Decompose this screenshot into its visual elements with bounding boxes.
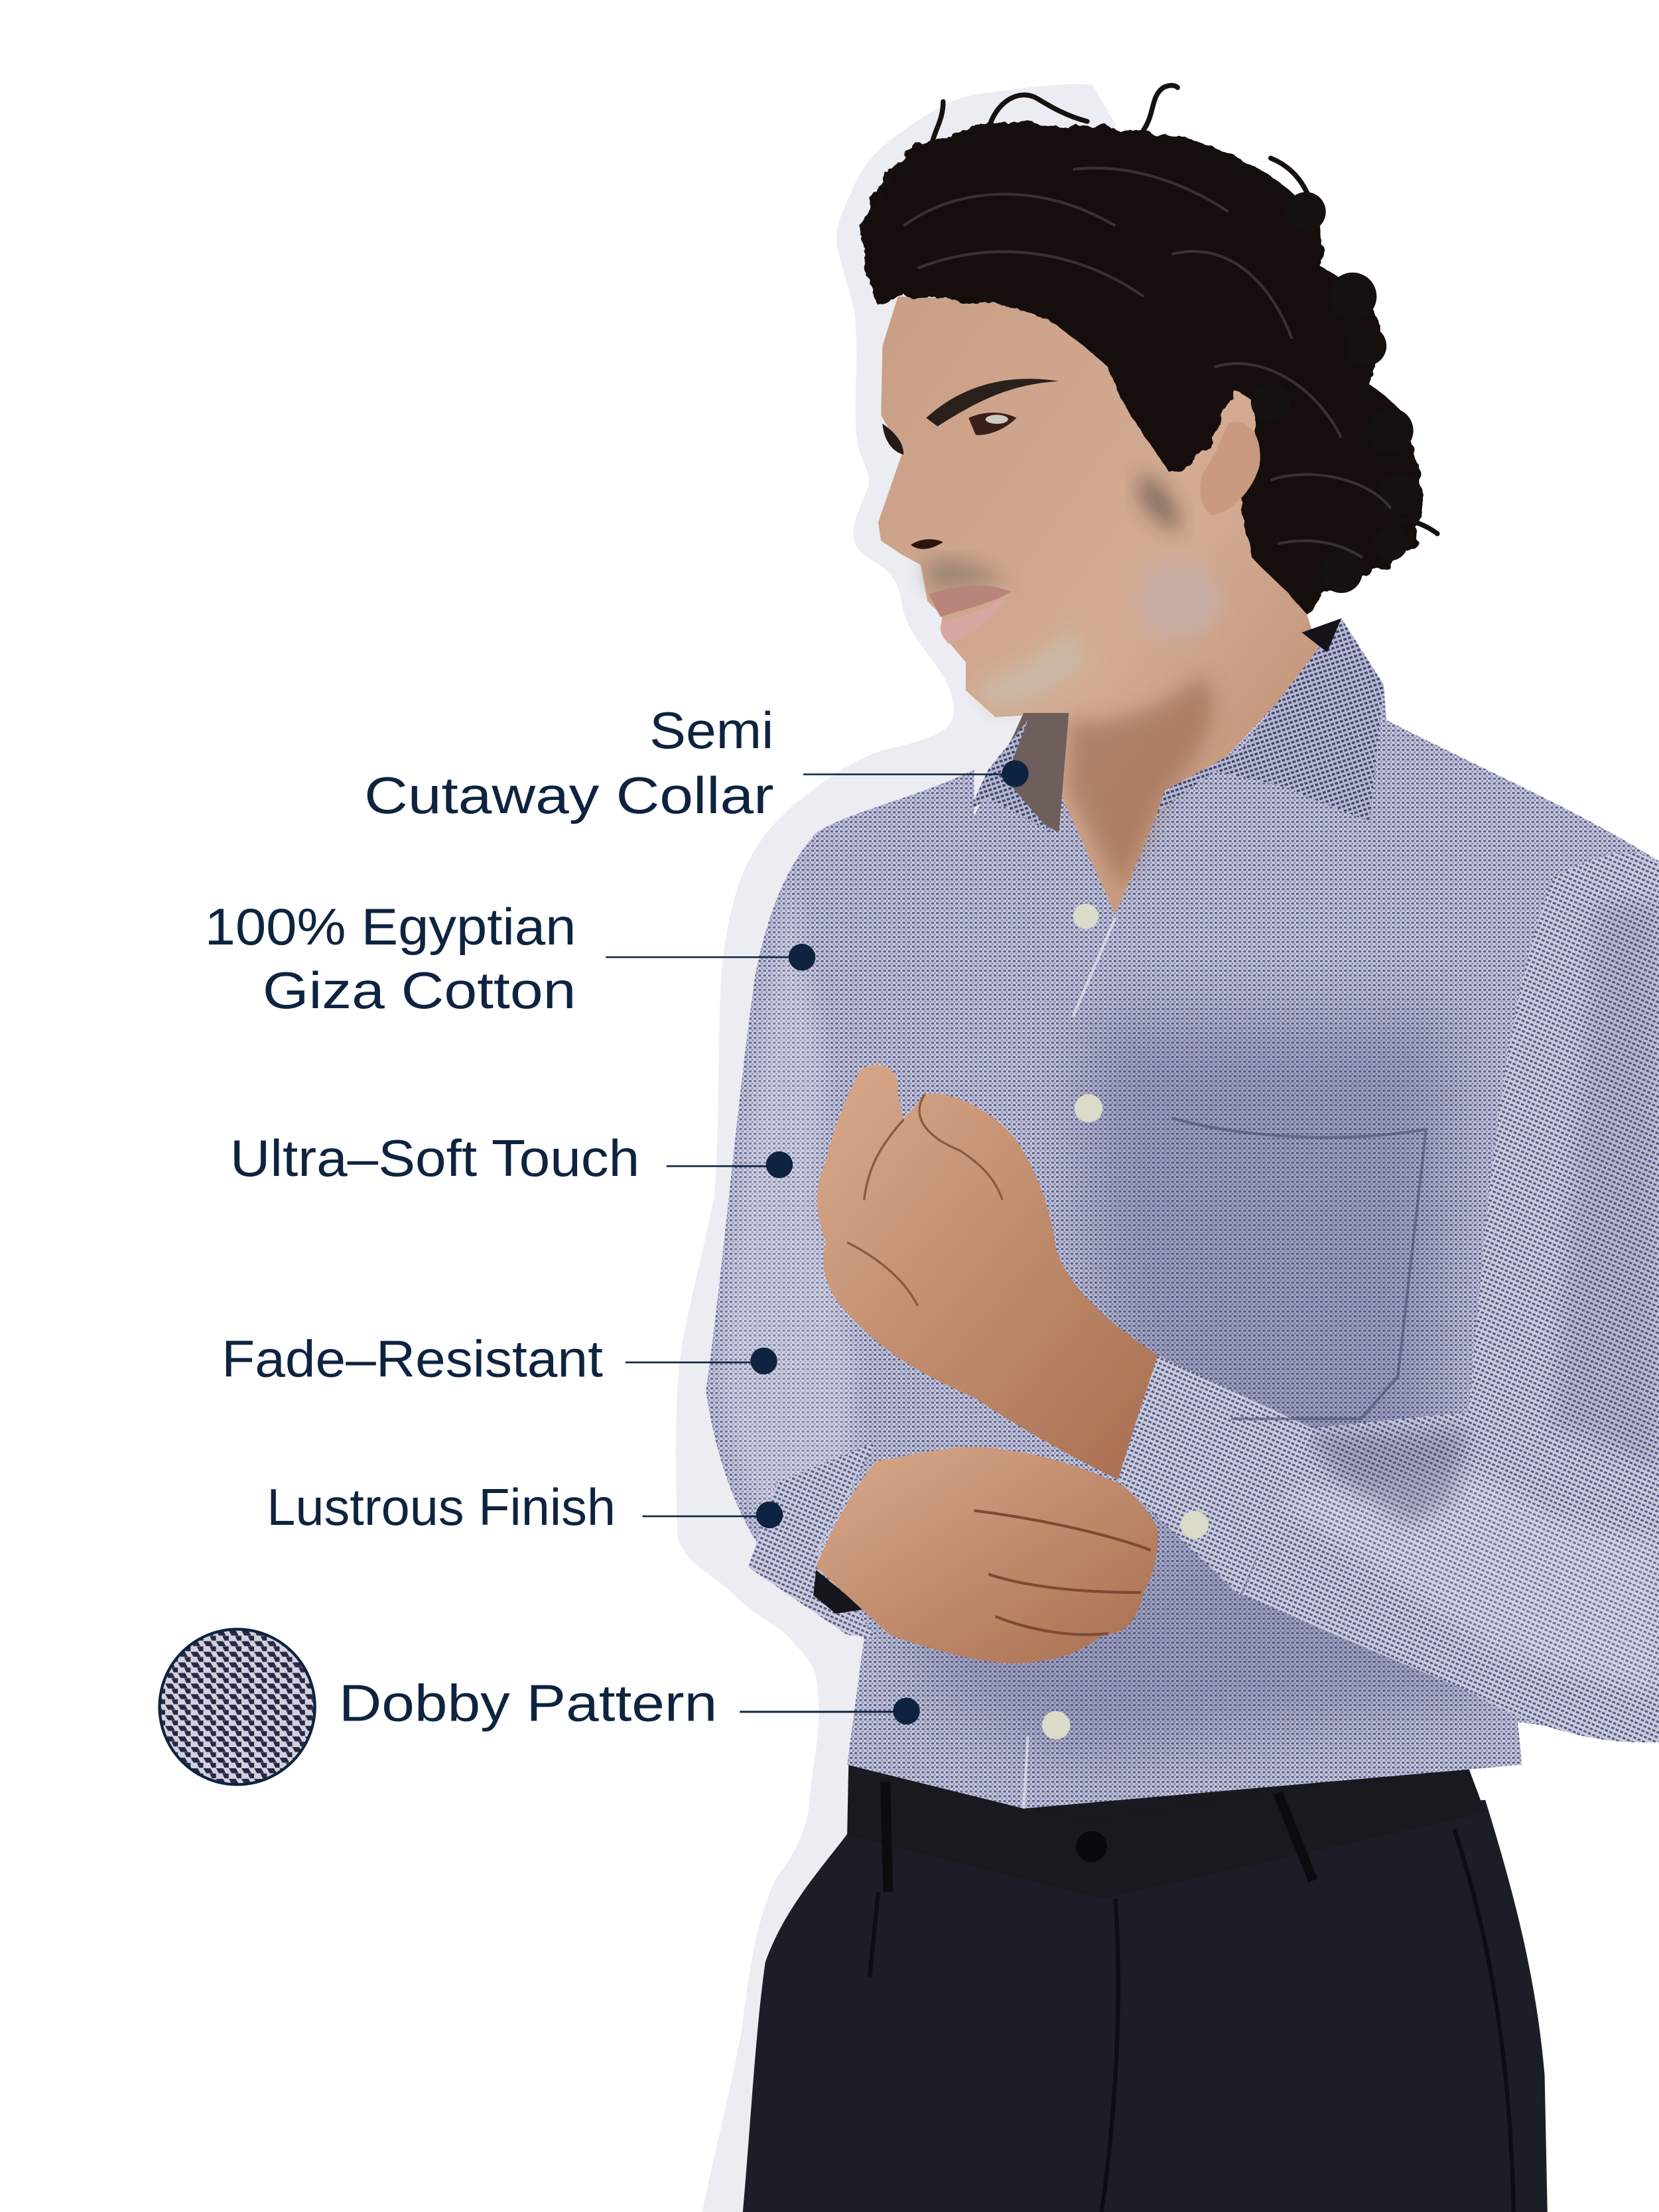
callout: ultra-soft touch <box>230 1130 793 1187</box>
eyebrow <box>926 379 1059 426</box>
callout: dobby pattern: Dobby Pattern <box>339 1675 717 1732</box>
callout: semi cutaway collar: Semi <box>649 702 773 759</box>
collar inner dark <box>1301 618 1341 652</box>
model photo illustration <box>706 86 1659 2212</box>
belt <box>847 1764 1485 1899</box>
callout: egyptian giza cotton <box>205 899 815 1019</box>
stubble chin <box>974 628 1087 713</box>
trouser details <box>870 1830 1514 2212</box>
callout: egyptian giza cotton: 100% Egyptian <box>205 899 576 956</box>
callout: lustrous finish <box>267 1479 783 1536</box>
hair curl clusters <box>1251 192 1422 593</box>
shirt body <box>706 618 1659 1809</box>
cuff right arm <box>1118 1355 1313 1595</box>
sideburn <box>1138 473 1180 534</box>
ear <box>1200 423 1260 515</box>
background silhouette <box>676 84 1116 2212</box>
callout: semi cutaway collar <box>364 702 1029 824</box>
collar left <box>968 720 1052 833</box>
trousers <box>743 1800 1548 2212</box>
hair <box>864 86 1437 612</box>
callout: fade-resistant: Fade–Resistant <box>222 1331 603 1388</box>
right sleeve <box>1242 853 1659 1742</box>
callout: egyptian giza cotton: Giza Cotton <box>263 962 576 1019</box>
collar inner <box>988 713 1069 833</box>
left cuff <box>748 1443 876 1638</box>
placket line <box>1024 918 1116 1809</box>
torso shading <box>918 1017 1496 1765</box>
pocket outline <box>1172 1118 1426 1419</box>
neck shadow <box>1067 675 1213 889</box>
cuff dark edge <box>813 1570 864 1614</box>
callout: dobby pattern <box>339 1675 920 1732</box>
fabric swatch <box>160 1629 315 1784</box>
callout: ultra-soft touch: Ultra–Soft Touch <box>230 1130 639 1187</box>
upper lip <box>929 586 1011 617</box>
belt loops <box>886 1782 1313 1892</box>
callout: fade-resistant <box>222 1331 777 1388</box>
lower lip <box>941 596 1008 644</box>
collar right <box>1158 618 1384 822</box>
eye <box>968 413 1017 435</box>
far eyebrow <box>882 424 903 454</box>
neck and face <box>878 296 1320 915</box>
jaw highlight <box>1136 560 1221 639</box>
upper hand <box>817 1065 1158 1480</box>
moustache shade <box>925 559 1008 590</box>
shirt buttons <box>1042 903 1209 1739</box>
callout: lustrous finish: Lustrous Finish <box>267 1479 616 1536</box>
callout: semi cutaway collar: Cutaway Collar <box>364 767 773 824</box>
lower hand <box>816 1447 1158 1663</box>
trouser button <box>1076 1831 1107 1862</box>
hair wisps <box>878 86 1437 534</box>
hair highlights <box>903 168 1391 558</box>
eye white <box>986 415 1008 424</box>
nose shadow <box>911 539 943 549</box>
sleeve highlight left <box>720 876 854 1589</box>
